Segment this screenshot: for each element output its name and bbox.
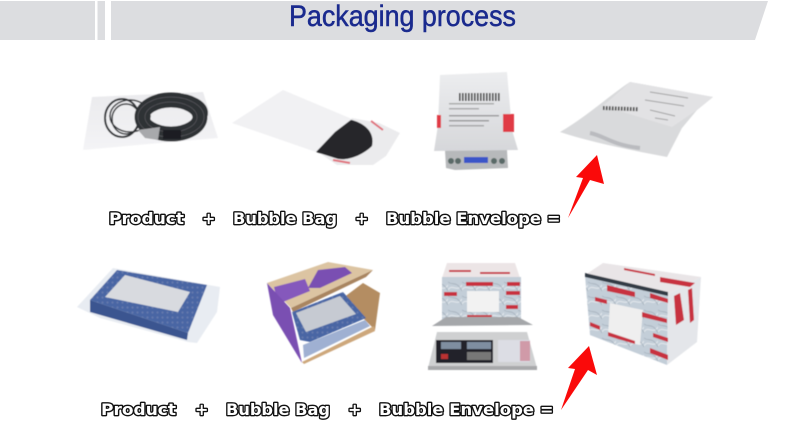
plus sign: +	[202, 209, 215, 228]
photo: product in clear bag	[83, 92, 218, 150]
photo: product wrapped in bubble film	[77, 268, 220, 343]
photo: open shipping carton	[267, 262, 380, 364]
photo: sealed bubble envelope	[560, 82, 713, 157]
label: bubble envelope: Bubble Envelope	[379, 400, 534, 419]
photo: product in bubble bag	[232, 90, 400, 165]
equals sign: =	[547, 209, 560, 228]
equals sign: =	[540, 400, 553, 419]
plus sign: +	[355, 209, 368, 228]
arrow: top row	[568, 155, 604, 218]
plus sign: +	[348, 400, 361, 419]
arrow: bottom row	[561, 346, 597, 410]
photo: carton on counting scale	[428, 263, 537, 370]
label: bubble envelope: Bubble Envelope	[386, 209, 541, 228]
photo: bubble envelope on scale	[434, 72, 518, 170]
title: Packaging process	[289, 0, 516, 33]
photo: sealed carton	[585, 263, 701, 365]
label: bubble bag: Bubble Bag	[226, 400, 330, 419]
label: bubble bag: Bubble Bag	[233, 209, 337, 228]
label: product: Product	[109, 209, 184, 228]
label: product: Product	[101, 400, 176, 419]
row 1 labels	[109, 209, 560, 228]
header banner	[0, 0, 768, 40]
plus sign: +	[195, 400, 208, 419]
row 2 labels	[101, 400, 553, 419]
